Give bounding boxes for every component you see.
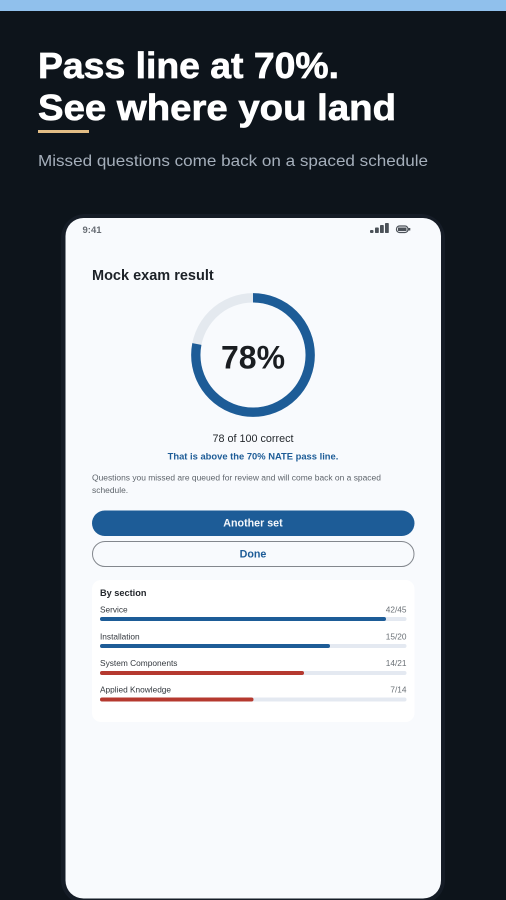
explanation — [92, 472, 381, 495]
title accent underline — [38, 130, 89, 133]
button: done — [92, 542, 414, 566]
title: See where you land — [38, 87, 396, 128]
button: another set: Another set — [223, 518, 283, 530]
icon: battery — [396, 226, 410, 232]
row: applied knowledge — [100, 684, 407, 702]
screen heading: Mock exam result — [92, 268, 214, 284]
explanation: Questions you missed are queued for review and will come back on a spaced — [92, 472, 381, 482]
row: service — [100, 604, 407, 621]
row: installation: Installation — [100, 632, 140, 642]
row: service: Service — [100, 604, 128, 614]
row: applied knowledge: 7/14 — [390, 684, 407, 694]
row: applied knowledge: Applied Knowledge — [100, 684, 171, 694]
ring value: 78% — [221, 340, 285, 376]
explanation: schedule. — [92, 485, 128, 495]
row: installation: 15/20 — [386, 632, 407, 642]
button: done: Done — [240, 548, 266, 560]
section heading: By section — [100, 588, 147, 598]
row: installation — [100, 632, 407, 648]
row: service: 42/45 — [386, 604, 407, 614]
status bar time: 9:41 — [82, 225, 102, 236]
phone mockup — [61, 214, 445, 900]
row: system components — [100, 658, 407, 675]
subtitle: Missed questions come back on a spaced schedule — [38, 153, 428, 170]
row: system components: System Components — [100, 658, 177, 668]
progress ring 78% — [196, 298, 310, 412]
icon: signal bars — [370, 223, 389, 233]
panel: by section — [92, 580, 414, 722]
top light blue band — [0, 0, 506, 11]
title: Pass line at 70%. — [38, 45, 339, 86]
score text: 78 of 100 correct — [212, 433, 294, 445]
title — [38, 45, 396, 128]
pass line message: That is above the 70% NATE pass line. — [168, 450, 338, 462]
button: another set — [92, 510, 414, 536]
row: system components: 14/21 — [386, 658, 407, 668]
